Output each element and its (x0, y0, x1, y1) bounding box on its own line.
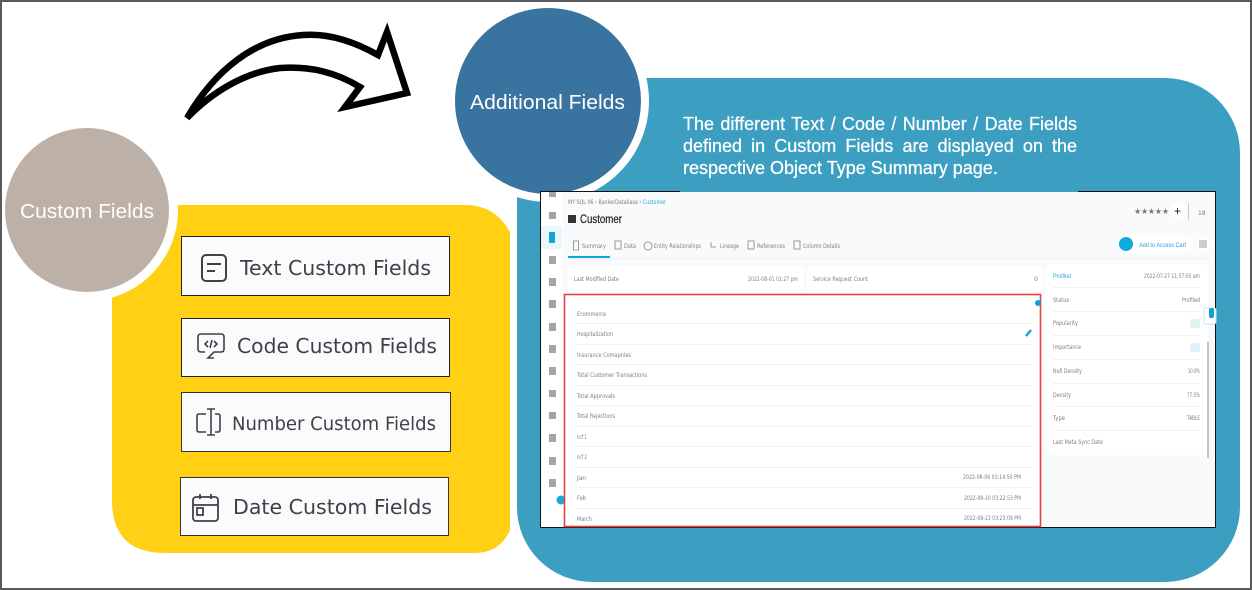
icon: code monitor (198, 334, 224, 358)
properties panel: 2022-07-27 11:37:05 am (1144, 273, 1200, 280)
summary cards: Last Modified Date (574, 276, 619, 283)
custom field list: Total Customer Transactions (576, 372, 647, 379)
custom field list: Hospitalization (577, 331, 613, 338)
properties panel: Importance (1053, 344, 1081, 351)
icon: calendar (193, 494, 218, 521)
properties panel: Popularity (1053, 320, 1078, 327)
header: + (1174, 204, 1181, 218)
tabs: Lineage (720, 243, 739, 250)
tabs: Column Details (803, 243, 840, 250)
card: text custom fields (182, 236, 450, 296)
custom field list: ncf 2 (577, 454, 587, 461)
screenshot: customer summary page (540, 189, 1216, 528)
arrow (187, 32, 407, 118)
summary cards: 0 (1034, 276, 1038, 283)
card: date custom fields: Date Custom Fields (233, 495, 432, 519)
custom field list: Ecommerce (577, 311, 606, 318)
card: date custom fields (180, 478, 448, 536)
sidebar (541, 192, 566, 527)
properties panel: Profiled (1182, 297, 1200, 304)
properties panel: Profiled (1053, 274, 1071, 280)
tabs (568, 241, 1210, 259)
card: number custom fields: Number Custom Fields (232, 413, 436, 435)
card: number custom fields (182, 392, 450, 452)
access cart button: Add to Access Cart (1139, 243, 1186, 249)
access cart button (1119, 235, 1210, 253)
custom field list: Feb (577, 495, 586, 502)
card: code custom fields (182, 318, 450, 376)
custom field list: ncf 1 (577, 434, 587, 441)
icon: text field (202, 255, 226, 281)
properties panel: Status (1053, 297, 1069, 304)
header (568, 199, 1206, 226)
header: Customer (580, 214, 622, 226)
badge: custom fields: Custom Fields (20, 201, 154, 223)
properties panel: Type (1052, 415, 1065, 422)
tabs: References (757, 243, 785, 250)
summary cards (568, 266, 1043, 290)
card: code custom fields: Code Custom Fields (237, 334, 437, 358)
summary cards: 2022-08-01 01:27 pm (748, 276, 798, 283)
badge: custom fields (5, 128, 169, 292)
properties panel: 10.0% (1188, 368, 1200, 375)
text block: description: The different Text / Code / Number / Date Fields defined in Custom Fields are displayed on the respective Object Type Summary page. (683, 114, 1077, 178)
custom field list: March (577, 516, 592, 523)
tabs: Summary (582, 243, 606, 250)
badge: additional fields (455, 8, 641, 194)
properties panel: Last Meta Sync Date (1053, 439, 1103, 446)
custom field list: 2022-08-10 03:22:53 PM (964, 495, 1021, 502)
properties panel: Null Density (1053, 368, 1082, 375)
tabs: Data (624, 243, 636, 250)
properties panel (1046, 264, 1216, 458)
custom field list: 2022-08-06 03:14:50 PM (963, 474, 1021, 481)
summary cards: Service Request Count (813, 276, 869, 283)
panel: custom fields background (112, 205, 510, 553)
card: text custom fields: Text Custom Fields (239, 256, 431, 280)
custom field list: Jan (576, 475, 586, 482)
header: ★★★★★ (1134, 207, 1169, 216)
badge: additional fields: Additional Fields (470, 92, 625, 114)
properties panel: Density (1053, 392, 1071, 399)
header: MY SQL 06 › BankerDatabase › Customer (568, 199, 666, 206)
custom field list (564, 294, 1041, 526)
custom field list: Total Rejections (576, 413, 615, 420)
custom field list: 2022-08-13 03:23:09 PM (964, 515, 1021, 522)
panel: additional fields background (517, 78, 1240, 582)
custom field list: Total Approvals (576, 393, 615, 400)
icon: number input (197, 409, 220, 435)
tabs: Entity Relationships (654, 243, 701, 250)
custom field list: Insurance Comapnies (577, 352, 631, 359)
header: 18 (1198, 210, 1206, 217)
properties panel: 77.5% (1187, 392, 1200, 399)
properties panel: TABLE (1186, 415, 1200, 422)
